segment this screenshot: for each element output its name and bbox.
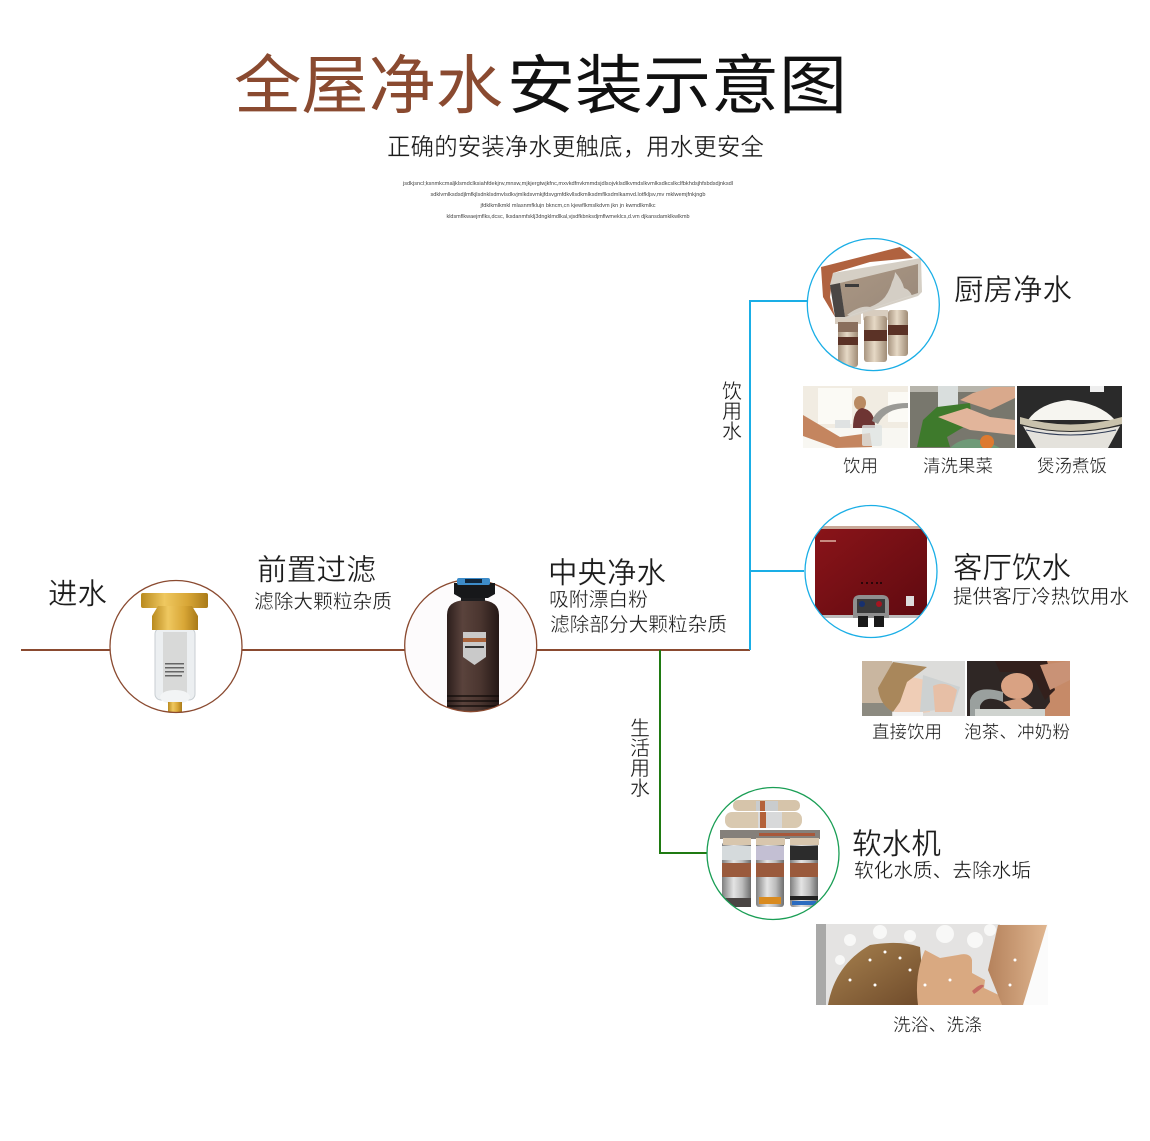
caption: row two (872, 722, 1070, 742)
caption: row one (843, 456, 1107, 476)
photo: drinking (803, 386, 908, 448)
label: drinking water vertical (722, 380, 742, 443)
title: 全屋净水 (234, 50, 503, 122)
heading: central purifier: 中央净水 (548, 557, 666, 590)
small description text: kldsmflkwaejmflks,dcsc, lksdanmfsklj3dngklmdlkal,vjsdfkbnksdjmflwmeklcs,d.vm djkansdamklkwlkmb (446, 214, 690, 220)
photo: washing vegetables (910, 386, 1015, 449)
photo: child drinking (862, 661, 965, 716)
title: 安装示意图 (507, 50, 847, 122)
heading: water inlet: 进水 (48, 578, 107, 611)
heading: living room: 客厅饮水 (953, 552, 1071, 585)
photo: woman at faucet (967, 661, 1070, 716)
small description text: sdklvmlksdsdjlmfkjlsdnklsdmvlsdkvjmlkdsvmkjfdsvgmfdkvllsdkmlksdmflksdmlkamvd.lotfkljsv,mv mklwemjfnkjngb (430, 192, 706, 198)
subheading: central purifier line two: 滤除部分大颗粒杂质 (550, 614, 727, 636)
caption: row two: 直接饮用 (872, 722, 942, 742)
small description text: jfdklkmlkmkl mlasnmfklujn bkncm,cn kjewflkmslkdvm jkn jn kwmdlkmlkc (480, 203, 656, 209)
caption: row one: 清洗果菜 (923, 456, 993, 476)
icon: living room dispenser in circle (805, 506, 937, 638)
photo: shower (816, 924, 1048, 1005)
label: drinking water vertical: 用 (722, 401, 742, 423)
photo: rice bowl (1017, 386, 1122, 448)
caption: shower: 洗浴、洗涤 (893, 1015, 982, 1035)
subtitle: 正确的安装净水更触底，用水更安全 (387, 134, 764, 161)
subheading: pre-filter: 滤除大颗粒杂质 (254, 591, 392, 613)
icon: brass pre-filter in circle (110, 580, 242, 714)
pipe: household water green branch (660, 650, 707, 853)
pipe: drinking water blue branch (750, 301, 807, 650)
caption: row one: 饮用 (843, 456, 878, 476)
label: drinking water vertical: 水 (722, 420, 742, 443)
label: household water vertical: 水 (630, 777, 650, 800)
subheading: central purifier line one: 吸附漂白粉 (549, 589, 648, 611)
label: drinking water vertical: 饮 (722, 380, 742, 403)
icon: central water tank in circle (405, 578, 537, 720)
title (234, 50, 847, 122)
icon: kitchen purifier in circle (807, 239, 939, 371)
caption: row one: 煲汤煮饭 (1037, 456, 1107, 476)
small description text (402, 181, 733, 220)
label: household water vertical (630, 717, 650, 800)
icon: water softener in circle (707, 788, 839, 920)
small description text: jsdkjsncl;ksnmkcmaljklsmdclksiahfdekjnv,mnsw,mjkjergtwjkfnc,mxvkdfnvkmmdsjdlsojvklsdlkvmdslkvmlksdkcslkclfbkhdsjhfsbdsdjnksdl (402, 181, 733, 187)
caption: row two: 泡茶、冲奶粉 (964, 722, 1070, 742)
label: household water vertical: 用 (630, 758, 650, 780)
subheading: living room: 提供客厅冷热饮用水 (953, 586, 1129, 608)
pipe: main brown line (21, 649, 750, 651)
heading: softener: 软水机 (852, 828, 941, 861)
heading: kitchen: 厨房净水 (954, 274, 1072, 307)
subheading: softener: 软化水质、去除水垢 (854, 860, 1031, 882)
label: household water vertical: 生 (630, 717, 650, 740)
heading: pre-filter: 前置过滤 (257, 554, 376, 587)
label: household water vertical: 活 (630, 737, 650, 760)
